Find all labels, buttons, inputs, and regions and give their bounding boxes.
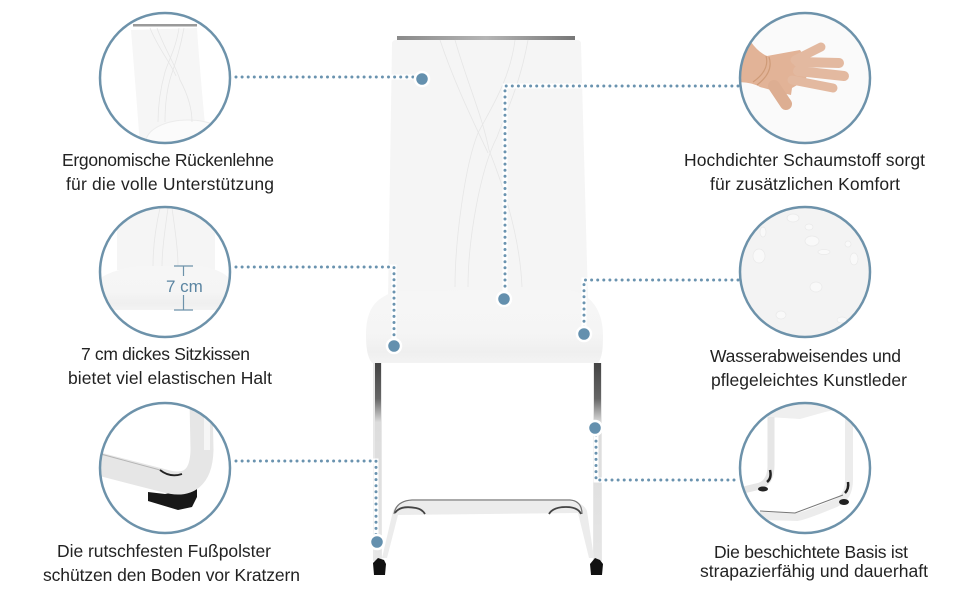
panel: coated base detail [735,400,880,533]
icon: hand [735,42,844,104]
label: coated base [700,542,928,581]
label: backrest: für die volle Unterstützung [66,174,274,194]
label: foam: für zusätzlichen Komfort [710,174,900,194]
icon: black foot pad [148,488,197,510]
label: seat cushion: bietet viel elastischen Halt [68,368,272,388]
icon: water drops [753,214,858,323]
chair feet [373,558,386,575]
panel: seat cushion detail [100,205,232,337]
label: foam [684,150,925,194]
dotted leader lines [236,77,738,537]
label: leatherette: Wasserabweisendes und [710,346,901,366]
chair seat [366,290,603,363]
measure: 7 cm: 7 cm [166,277,203,296]
label: foot pads: schützen den Boden vor Kratzern [43,565,300,585]
chair [366,36,603,575]
label: seat cushion [68,344,272,388]
panel: backrest detail [100,13,230,164]
label: leatherette [710,346,907,390]
chair frame [373,363,603,575]
panel: water drops on leatherette [740,207,870,337]
panel: foot pad detail [95,400,230,533]
label: foam: Hochdichter Schaumstoff sorgt [684,150,925,170]
label: leatherette: pflegeleichtes Kunstleder [711,370,907,390]
chair backrest [388,36,588,300]
label: coated base: strapazierfähig und dauerhaft [700,561,928,581]
label: seat cushion: 7 cm dickes Sitzkissen [81,344,250,364]
panel: foam with hand [735,13,870,143]
label: backrest: Ergonomische Rückenlehne [62,150,274,170]
label: backrest [62,150,274,194]
label: foot pads [43,541,300,585]
marker dots [370,72,602,549]
label: foot pads: Die rutschfesten Fußpolster [57,541,271,561]
label: coated base: Die beschichtete Basis ist [714,542,908,562]
